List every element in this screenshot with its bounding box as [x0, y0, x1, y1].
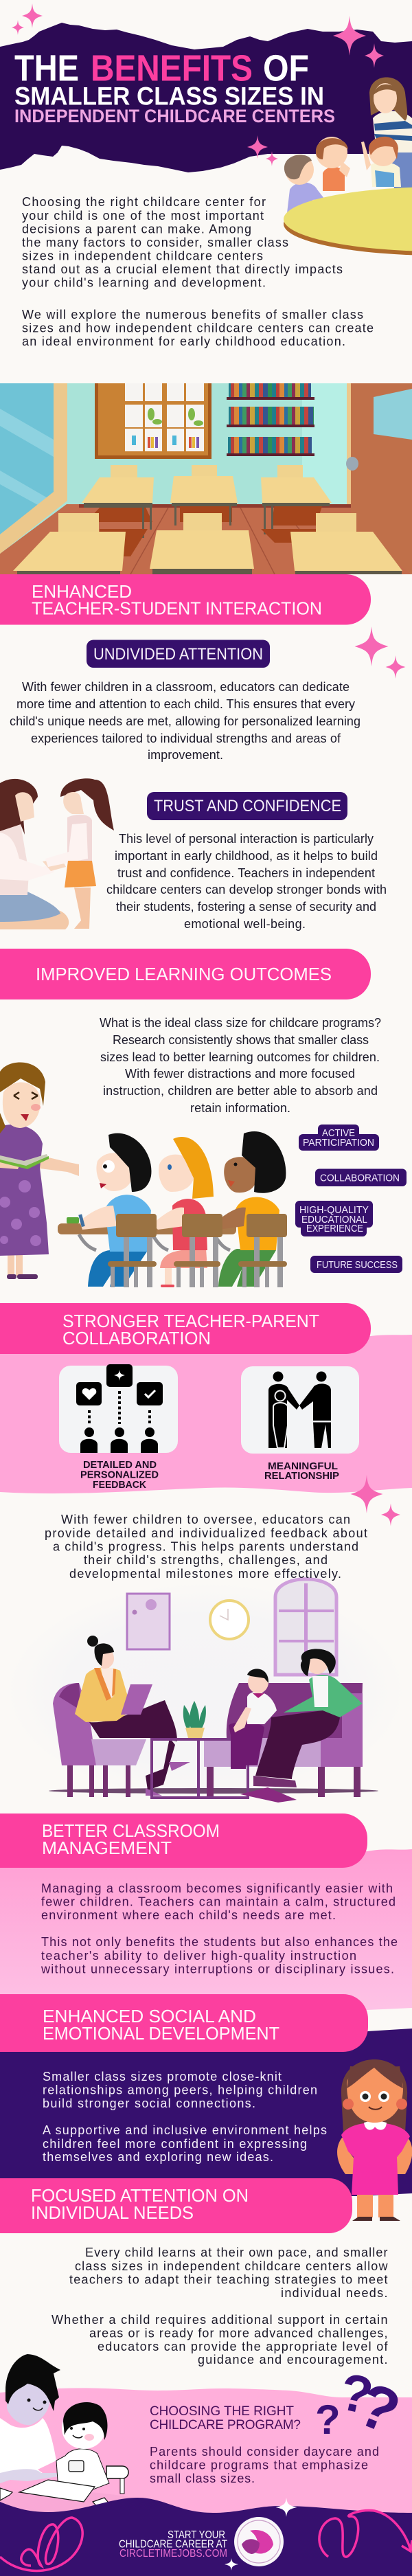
tag: active participation	[299, 1125, 379, 1151]
text: collaboration paragraph: their child's strengths, challenges, and	[84, 1553, 328, 1567]
label: detailed and personalized feedback	[80, 1459, 159, 1491]
text: social and emotional	[43, 2070, 327, 2164]
sub heading: undivided attention	[87, 640, 270, 668]
heading: enhanced teacher-student interaction	[0, 574, 371, 625]
heading: focused attention on individual needs: INDIVIDUAL NEEDS	[31, 2202, 194, 2223]
child 3 raised hand	[361, 137, 401, 187]
heading: better classroom management: MANAGEMENT	[42, 1838, 172, 1858]
heading: better classroom management: BETTER CLASSROOM	[42, 1820, 220, 1841]
text: individual needs: class sizes in independent childcare centers allow	[75, 2259, 389, 2273]
text: undivided attention: With fewer children in a classroom, educators can dedicate	[22, 680, 350, 694]
text: footer call to action	[119, 2529, 227, 2560]
text: collaboration paragraph: With fewer children to oversee, educators can	[61, 1513, 350, 1526]
header sparkles	[12, 3, 384, 166]
daughter	[45, 778, 114, 929]
decorative swirl right with arrow	[319, 2511, 412, 2557]
intro text: sizes in independent childcare centers	[22, 249, 263, 262]
illustration: teacher with book	[0, 1062, 79, 1279]
illustration: mother and daughter	[0, 778, 114, 929]
teacher	[75, 1636, 190, 1796]
heading: improved learning outcomes	[0, 949, 371, 999]
text: individual needs: individual needs.	[281, 2286, 387, 2300]
pupil 2	[152, 1137, 214, 1287]
text: collaboration paragraph: developmental milestones more effectively.	[69, 1567, 341, 1581]
text: social and emotional: Smaller class sizes promote close-knit	[43, 2070, 282, 2083]
illustration: classroom	[0, 383, 412, 574]
text: social and emotional: themselves and exploring new ideas.	[43, 2150, 273, 2164]
text: collaboration paragraph	[45, 1513, 367, 1581]
text: trust and confidence: their students, fostering a sense of security and	[116, 900, 376, 914]
text: learning outcomes: instruction, children are better able to absorb and	[103, 1084, 378, 1098]
text: learning outcomes: Research consistently shows that smaller class	[113, 1033, 369, 1047]
sub heading: trust and confidence	[147, 792, 347, 820]
text: individual needs: teachers to adapt their teaching strategies to meet	[69, 2272, 387, 2286]
parent	[0, 2354, 60, 2483]
tag: high-quality educational experience	[295, 1201, 373, 1236]
illustration: teacher and children at table	[284, 77, 412, 256]
intro text: We will explore the numerous benefits of smaller class	[22, 308, 363, 321]
tag: high-quality educational experience: EXPERIENCE	[306, 1223, 363, 1234]
desk	[58, 1223, 236, 1234]
icon: question marks: ?	[315, 2397, 341, 2443]
sofa	[204, 1683, 363, 1797]
text: trust and confidence: important in early childhood, as it helps to build	[115, 849, 378, 863]
mother	[0, 779, 69, 929]
sub heading: undivided attention: UNDIVIDED ATTENTION	[93, 645, 263, 664]
sub heading: trust and confidence: TRUST AND CONFIDENCE	[154, 797, 341, 815]
child	[229, 1669, 277, 1769]
clock	[210, 1601, 249, 1639]
teacher	[369, 77, 412, 192]
text: classroom management: environment where each child's needs are met.	[41, 1908, 336, 1922]
intro text: your child's learning and development.	[22, 276, 266, 290]
parent	[240, 1649, 363, 1803]
notice board	[95, 383, 211, 459]
panel: footer	[0, 2498, 412, 2576]
text: learning outcomes: What is the ideal class size for childcare programs?	[100, 1016, 381, 1030]
tag: collaboration: COLLABORATION	[320, 1172, 400, 1184]
panel: social and emotional purple band	[0, 2029, 412, 2196]
text: collaboration paragraph: provide detailed and individualized feedback about	[45, 1526, 367, 1540]
icon: question marks: ?	[348, 2370, 409, 2448]
text: trust and confidence: childcare centers can develop stronger bonds with	[106, 883, 387, 896]
text: call to action: Parents should consider daycare and	[150, 2445, 379, 2459]
text: social and emotional: children feel more confident in expressing	[43, 2137, 307, 2151]
text: individual needs: areas or is ready for more advanced challenges,	[89, 2326, 387, 2340]
text: classroom management: fewer children. Teachers can maintain a calm, structured	[41, 1895, 396, 1908]
tag: active participation: PARTICIPATION	[303, 1137, 374, 1149]
chairs	[108, 1214, 287, 1287]
intro text: the many factors to consider, smaller class	[22, 236, 288, 249]
text: footer call to action: START YOUR	[168, 2529, 225, 2541]
text: learning outcomes	[100, 1016, 381, 1115]
illustration: parent and child studying	[0, 2354, 134, 2512]
heading: enhanced social and emotional development	[0, 1994, 368, 2052]
text: trust and confidence: trust and confidence. Teachers in independent	[117, 866, 375, 880]
heading: enhanced social and emotional development: ENHANCED SOCIAL AND	[43, 2006, 256, 2026]
intro text: decisions a parent can make. Among	[22, 223, 251, 236]
text: call to action: childcare programs that emphasize	[150, 2458, 368, 2472]
text: classroom management: without unnecessary interruptions or disciplinary issues.	[41, 1962, 394, 1976]
text: footer call to action: CIRCLETIMEJOBS.COM	[119, 2548, 227, 2560]
text: footer call to action: CHILDCARE CAREER AT	[119, 2539, 227, 2550]
text: trust and confidence	[106, 832, 387, 931]
text: undivided attention: child's unique needs are met, allowing for personalized learning	[10, 714, 360, 728]
intro text: Choosing the right childcare center for	[22, 195, 266, 209]
illustration: parent teacher meeting	[7, 1579, 405, 1803]
heading: stronger teacher-parent collaboration: STRONGER TEACHER-PARENT	[62, 1311, 319, 1331]
text: call to action: small class sizes.	[150, 2472, 255, 2485]
tag: future success	[310, 1256, 402, 1273]
text: collaboration paragraph: a child's progress. This helps parents understand	[53, 1540, 358, 1554]
text: individual needs: educators can provide the appropriate level of	[98, 2340, 388, 2353]
text: call to action	[150, 2404, 379, 2485]
tag: high-quality educational experience: EDUCATIONAL	[301, 1214, 367, 1225]
sparkles white	[225, 2498, 297, 2571]
heading: enhanced teacher-student interaction: TEACHER-STUDENT INTERACTION	[32, 598, 322, 618]
title	[14, 48, 335, 126]
text: undivided attention: more time and attention to each child. This ensures that every	[16, 697, 355, 711]
title: BENEFITS	[91, 48, 253, 89]
decorative swirl left	[0, 2518, 82, 2571]
panel: header torn banner	[0, 23, 412, 172]
title: OF	[263, 48, 309, 89]
door	[346, 383, 412, 574]
label: detailed and personalized feedback: DETAILED AND	[83, 1459, 157, 1471]
title: SMALLER CLASS SIZES IN	[14, 82, 324, 110]
icon: question marks: ?	[334, 2362, 378, 2426]
intro text: sizes and how independent childcare centers can create	[22, 321, 374, 335]
text: call to action: CHILDCARE PROGRAM?	[150, 2418, 301, 2432]
intro text	[22, 195, 374, 348]
text: social and emotional: A supportive and inclusive environment helps	[43, 2123, 327, 2137]
label: detailed and personalized feedback: PERSONALIZED	[80, 1469, 159, 1481]
text: classroom management: Managing a classroom becomes significantly easier with	[41, 1882, 393, 1895]
icon card: meaningful relationship	[241, 1366, 359, 1454]
panel: collaboration pink band	[0, 1335, 412, 1493]
armchair	[53, 1683, 146, 1797]
child 1 lilac shirt	[284, 155, 330, 213]
text: trust and confidence: This level of personal interaction is particularly	[119, 832, 374, 846]
text: individual needs: guidance and encouragement.	[198, 2353, 387, 2366]
intro text: an ideal environment for early childhood education.	[22, 335, 345, 348]
text: undivided attention	[10, 680, 360, 762]
label: detailed and personalized feedback: FEEDBACK	[93, 1479, 146, 1491]
child	[56, 2402, 109, 2492]
tag: high-quality educational experience: HIGH-QUALITY	[299, 1204, 369, 1216]
pupil 1	[67, 1133, 151, 1287]
icon: question marks	[315, 2362, 409, 2448]
heading: enhanced social and emotional development: EMOTIONAL DEVELOPMENT	[43, 2023, 279, 2044]
title: INDEPENDENT CHILDCARE CENTERS	[14, 106, 335, 126]
icon card: detailed feedback	[59, 1364, 178, 1453]
text: call to action: CHOOSING THE RIGHT	[150, 2404, 294, 2419]
heading: stronger teacher-parent collaboration: COLLABORATION	[62, 1328, 211, 1348]
window	[0, 383, 67, 554]
pink table and notebook	[0, 2490, 134, 2512]
heading: focused attention on individual needs: FOCUSED ATTENTION ON	[31, 2185, 249, 2206]
tag: collaboration	[315, 1169, 407, 1186]
text: classroom management	[41, 1882, 398, 1976]
text: classroom management: teacher's ability to deliver high-quality instruction	[41, 1949, 356, 1963]
text: individual needs	[52, 2246, 389, 2366]
heading: enhanced teacher-student interaction: ENHANCED	[32, 581, 132, 602]
text: undivided attention: experiences tailored to individual strengths and areas of	[31, 732, 341, 745]
coffee table	[150, 1739, 248, 1798]
tag: future success: FUTURE SUCCESS	[317, 1259, 398, 1271]
wall art	[127, 1594, 170, 1649]
label: meaningful relationship	[264, 1460, 339, 1482]
plant	[183, 1701, 206, 1738]
stool	[106, 2466, 128, 2494]
panel: classroom management pink band	[0, 1849, 412, 2013]
panel: call to action pink band	[0, 2388, 412, 2521]
text: individual needs: Every child learns at their own pace, and smaller	[85, 2246, 387, 2259]
icon: circle time jobs logo	[234, 2517, 284, 2566]
text: social and emotional: build stronger social connections.	[43, 2097, 255, 2110]
text: undivided attention: improvement.	[148, 748, 223, 762]
text: trust and confidence: emotional well-being.	[184, 917, 306, 931]
front desks	[13, 513, 402, 574]
illustration: girl in pink dress	[337, 2059, 412, 2221]
illustration: seated pupils	[58, 1131, 287, 1287]
text: learning outcomes: With fewer distractions and more focused	[125, 1067, 355, 1081]
text: learning outcomes: retain information.	[190, 1101, 290, 1115]
heading: stronger teacher-parent collaboration	[0, 1303, 371, 1354]
sparkles	[350, 1475, 400, 1526]
text: classroom management: This not only benefits the students but also enhances the	[41, 1935, 398, 1949]
label: meaningful relationship: RELATIONSHIP	[264, 1470, 339, 1482]
intro text: your child is one of the most important	[22, 209, 264, 223]
sparkles	[354, 626, 405, 679]
title: THE	[14, 48, 79, 89]
bookshelves	[227, 383, 314, 456]
pupil 3	[213, 1131, 286, 1287]
text: learning outcomes: sizes lead to better learning outcomes for children.	[100, 1050, 380, 1064]
heading: focused attention on individual needs	[0, 2178, 352, 2233]
child 2 orange shirt	[316, 137, 350, 191]
back desks	[82, 465, 332, 538]
heading: improved learning outcomes: IMPROVED LEARNING OUTCOMES	[36, 964, 332, 984]
table	[284, 192, 412, 256]
text: individual needs: Whether a child requires additional support in certain	[52, 2313, 387, 2327]
window	[275, 1579, 336, 1675]
tag: active participation: ACTIVE	[322, 1127, 355, 1139]
heading: better classroom management	[0, 1814, 367, 1868]
intro text: stand out as a crucial element that directly impacts	[22, 262, 343, 276]
text: social and emotional: relationships among peers, helping children	[43, 2083, 317, 2097]
label: meaningful relationship: MEANINGFUL	[268, 1460, 338, 1472]
